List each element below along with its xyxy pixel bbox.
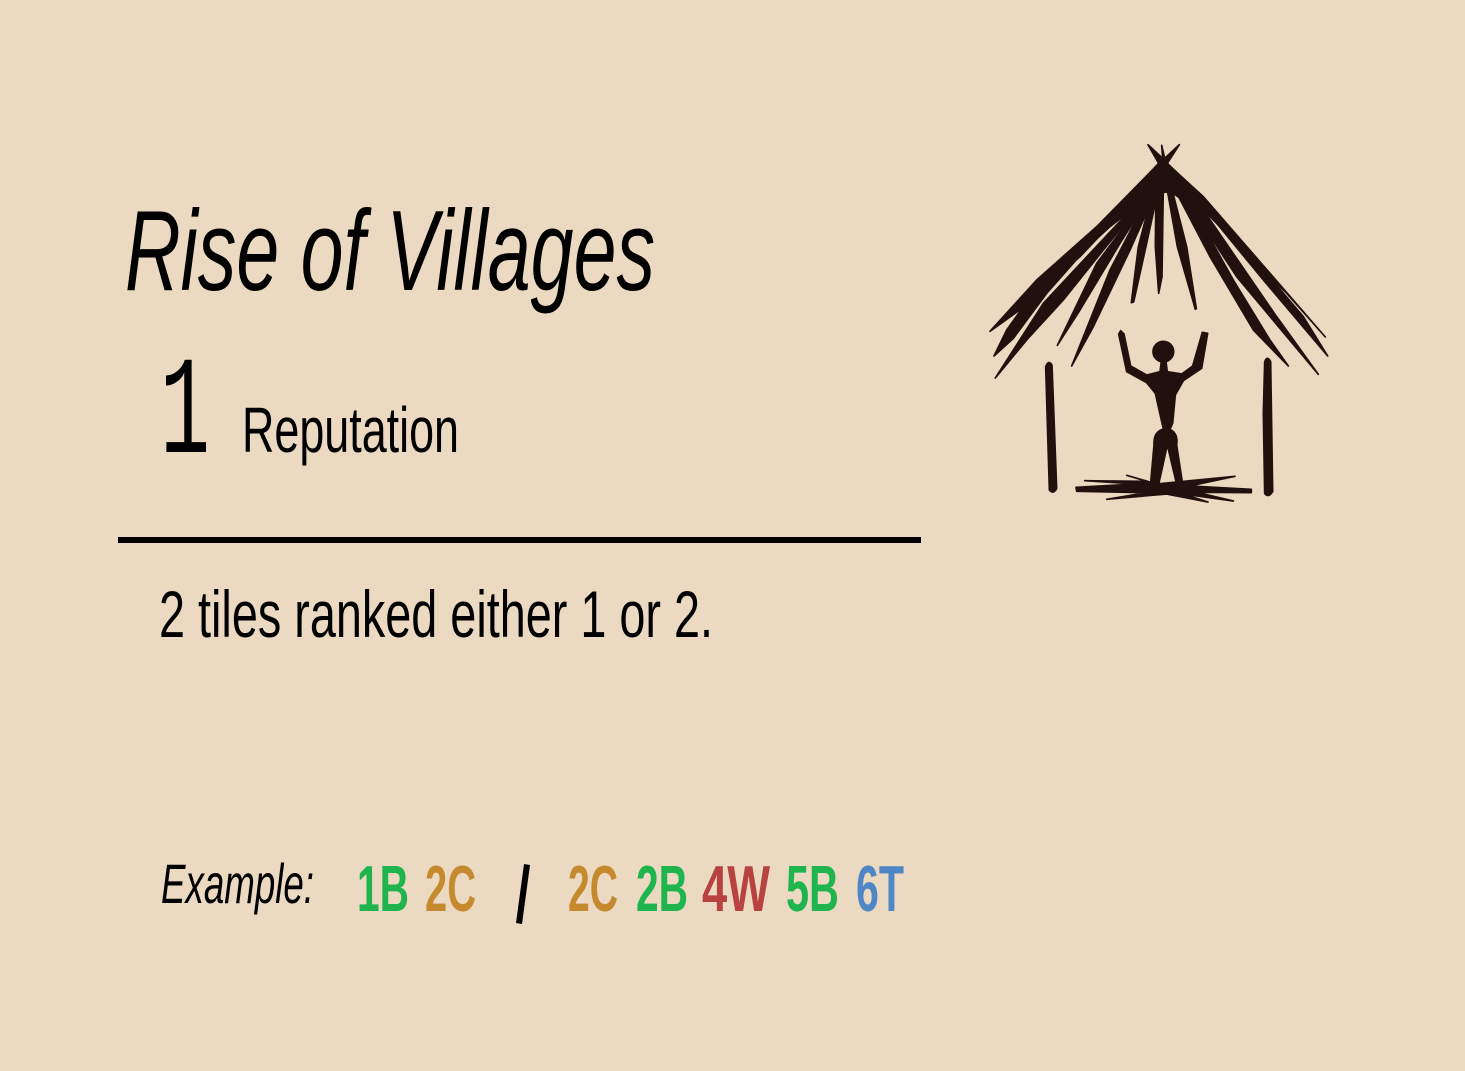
example label: Example:	[161, 852, 314, 915]
example tile sequence: 2B	[636, 852, 688, 925]
roof thatch	[990, 145, 1328, 378]
person	[1119, 331, 1208, 484]
rule description: 2 tiles ranked either 1 or 2.	[159, 577, 713, 651]
example tile sequence: 2C	[568, 852, 618, 925]
right wall post	[1263, 358, 1273, 495]
ground thatch	[1076, 475, 1251, 502]
icon: hut with figure	[990, 145, 1328, 502]
example tile sequence: 2C	[425, 852, 476, 925]
left wall post	[1046, 363, 1057, 492]
example tile sequence: 6T	[856, 852, 904, 925]
title: Rise of Villages	[125, 188, 655, 315]
reputation number: 1	[160, 336, 210, 495]
example tile sequence	[357, 852, 904, 925]
example tile sequence: 1B	[357, 852, 409, 925]
reputation label: Reputation	[242, 394, 459, 466]
separator slash	[516, 864, 530, 924]
example tile sequence: 5B	[786, 852, 839, 925]
example tile sequence: 4W	[702, 852, 770, 925]
divider rule	[118, 537, 921, 543]
